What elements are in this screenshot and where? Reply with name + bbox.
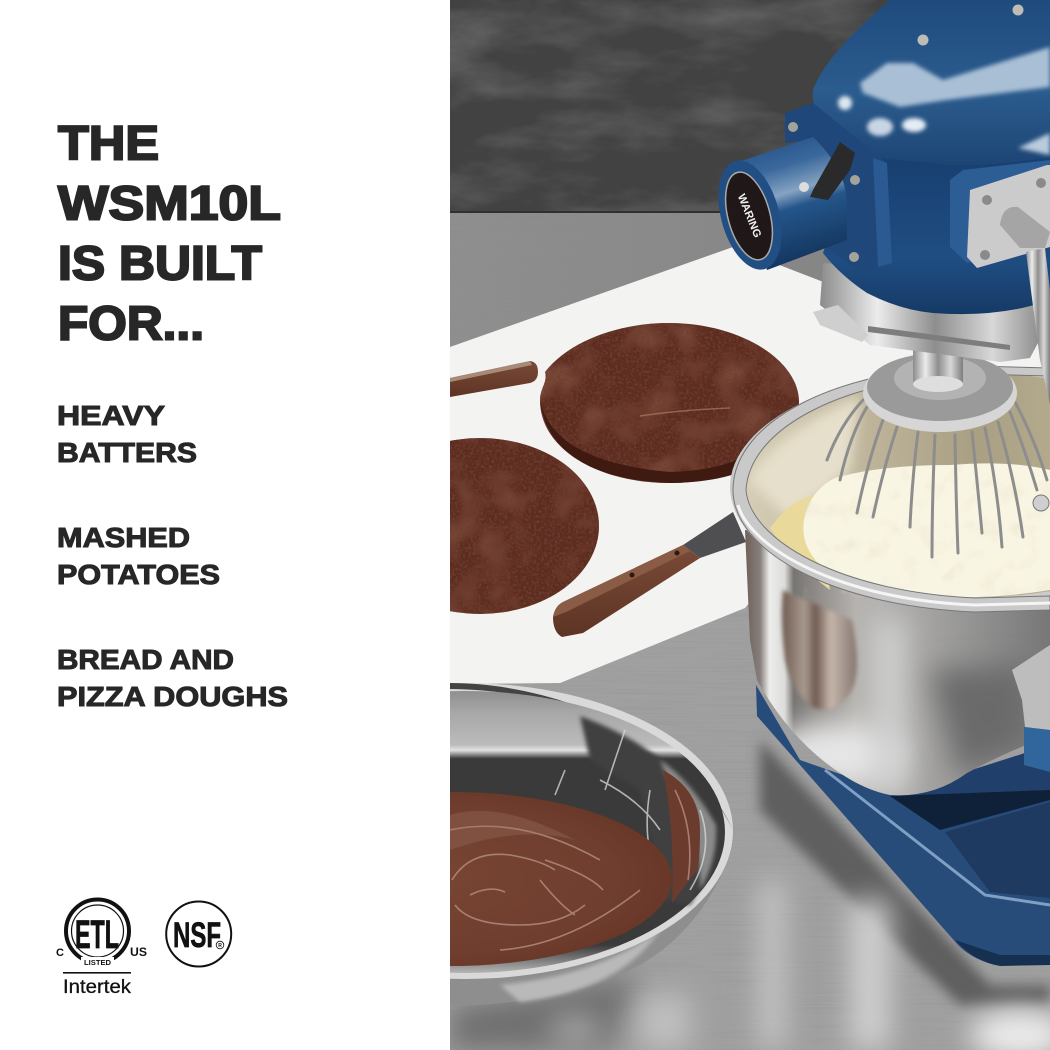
speed plate [950,160,1050,263]
cylinder end cap and badge: WARING [735,192,763,240]
icon: ETL listed Intertek mark: LISTED [84,960,111,967]
text: bread and pizza doughs: PIZZA DOUGHS [57,681,288,712]
whisk attachment [827,350,1049,557]
grey counter back [450,213,832,347]
text: mashed potatoes [57,522,220,590]
planetary cylinder [738,137,847,270]
text: heavy batters: BATTERS [57,437,197,468]
spatula, top left [450,361,538,397]
cake layer, left [450,438,599,614]
text: bread and pizza doughs [57,644,288,712]
blue dome [813,0,1050,165]
bowl lift bracket [1012,645,1050,772]
small steel bowl with chocolate [450,683,733,1005]
speed lever [1000,207,1050,248]
whisk wires [827,400,1047,557]
text: heavy batters: HEAVY [57,400,165,431]
title: IS BUILT [58,237,262,291]
stand mixer base [756,685,1050,966]
text: mashed potatoes: MASHED [57,522,190,553]
icon: NSF mark: R [218,943,222,949]
cylinder end cap and badge [718,160,782,270]
title: WSM10L [58,177,281,231]
blue column [823,157,1050,314]
icon: ETL listed Intertek mark: Intertek [63,977,132,998]
melted chocolate [450,770,700,966]
text: heavy batters [57,400,197,468]
title: THE [58,117,159,171]
whipped cream [770,463,1050,597]
bowl body [745,530,1050,795]
bowl rim [733,366,1050,612]
icon: ETL listed Intertek mark: US [130,947,147,959]
large mixing bowl [730,366,1050,795]
spatula, lower [553,512,746,637]
title: FOR... [58,297,204,351]
mixer head and neck [707,0,1050,405]
icon: ETL listed Intertek mark: ETL [75,913,119,957]
white cutting board [450,247,1050,684]
slate backsplash [450,0,890,213]
title [58,117,281,351]
steel counter [450,600,1050,1050]
panel: product photo illustration [450,0,1050,1050]
icon: ETL listed Intertek mark: C [56,947,64,959]
chrome collar [820,263,1050,362]
panel: white text column [0,0,450,1050]
icon: NSF mark [166,902,231,966]
whisk hub [863,375,1017,432]
icon: ETL listed Intertek mark [56,900,147,998]
icon: NSF mark: NSF [173,916,221,955]
text: bread and pizza doughs: BREAD AND [57,644,234,675]
text: mashed potatoes: POTATOES [57,559,220,590]
locking knob [810,142,855,200]
bowl interior [730,368,1050,606]
cake layer, top [535,320,805,490]
side plate [785,103,885,188]
